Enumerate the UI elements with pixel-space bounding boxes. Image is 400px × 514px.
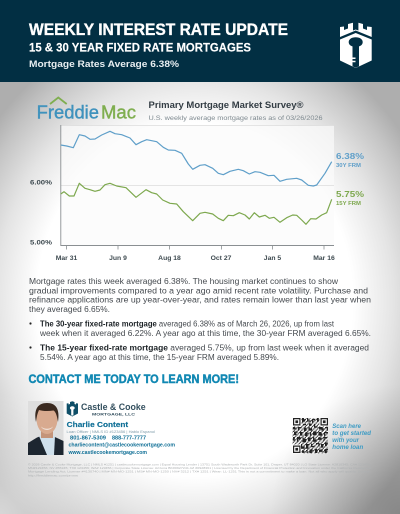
contact heading: CONTACT ME TODAY TO LEARN MORE! — [28, 372, 239, 386]
logo: Castle & Cooke Mortgage — [67, 401, 146, 416]
y-axis labels: 5.00% — [30, 240, 52, 246]
logo: Castle & Cooke Mortgage: Castle & Cooke — [81, 402, 146, 412]
bullet: 15-year mortgage — [29, 344, 369, 362]
email: charliecontent@castlecookemortgage.com — [68, 442, 175, 448]
legal disclaimer: http://freddiemac.com/pmms — [28, 474, 79, 478]
bullet: 15-year mortgage: 5.54%. A year ago at this time, the 15-year FRM averaged 5.89%. — [40, 353, 279, 362]
line chart: mortgage rates — [30, 125, 365, 262]
chart heading: Primary Mortgage Market Survey® — [148, 100, 304, 110]
logo: Freddie Mac — [37, 98, 136, 122]
average rate line: Mortgage Rates Average 6.38% — [29, 59, 179, 69]
bullet: 30-year mortgage — [29, 320, 371, 338]
logo: Castle & Cooke Mortgage: MORTGAGE, LLC — [92, 412, 135, 416]
header banner — [0, 0, 400, 82]
legal disclaimer — [28, 462, 371, 478]
name: Charlie Content — [67, 420, 129, 429]
website: www.castlecookemortgage.com — [68, 450, 147, 456]
y-axis labels — [30, 180, 52, 246]
logo: Freddie Mac: Freddie — [37, 102, 99, 122]
15Y FRM value label: 5.75% — [336, 189, 365, 199]
30-year rate line — [61, 131, 332, 186]
chart subheading: U.S. weekly average mortgage rates as of 03/26/2026 — [148, 115, 323, 122]
phone numbers: 801-867-5309 — [70, 436, 106, 442]
30Y FRM value label: 6.38% — [336, 151, 365, 161]
icon: castle key — [340, 23, 372, 68]
bullet: 15-year mortgage: The 15-year fixed-rate mortgage averaged 5.75%, up from last week when it averaged — [40, 344, 369, 352]
15Y FRM value label — [336, 189, 365, 207]
x-axis labels: Aug 18 — [158, 255, 181, 262]
QR code — [292, 418, 328, 454]
role and license: Loan Officer | NMLS ID #123456 | Hablo Espanol — [66, 429, 155, 434]
loan officer photo — [28, 401, 64, 455]
scan callout: with your — [332, 437, 360, 444]
15Y FRM value label: 15Y FRM — [336, 201, 361, 207]
x-axis labels: Jun 9 — [109, 255, 127, 262]
title: WEEKLY INTEREST RATE UPDATE — [29, 21, 288, 39]
intro paragraph: refinance applications are up year-over-year, and rates remain lower than last year when — [29, 296, 371, 304]
y-axis labels: 6.00% — [30, 180, 52, 186]
scan callout — [332, 423, 371, 451]
intro paragraph: Mortgage rates this week averaged 6.38%. The housing market continues to show — [29, 277, 338, 286]
x-axis labels — [56, 255, 335, 262]
bullet: 30-year mortgage: The 30-year fixed-rate mortgage averaged 6.38% as of March 26, 2026, up from last — [40, 320, 335, 328]
15-year rate line — [61, 183, 332, 224]
x-axis labels: Oct 27 — [211, 255, 232, 262]
30Y FRM value label: 30Y FRM — [336, 163, 361, 169]
subtitle: 15 & 30 YEAR FIXED RATE MORTGAGES — [29, 42, 251, 54]
intro paragraph — [29, 277, 371, 314]
legal disclaimer: MN#123456; NV #65345; TX# 123456; WA# 123456 | Corporate State License: Arizona BK#0927241 AZ #0928361 | Licensed by the Department of Financial Protection and Innovation under the California Residential — [28, 466, 371, 470]
phone numbers — [70, 436, 146, 442]
30Y FRM value label — [336, 151, 365, 169]
x-axis labels: Jan 5 — [264, 255, 281, 262]
phone numbers: 888-777-7777 — [112, 436, 146, 442]
scan callout: to get started — [332, 430, 371, 437]
intro paragraph: they averaged 6.65%. — [29, 305, 110, 314]
scan callout: Scan here — [332, 423, 361, 430]
intro paragraph: gradual improvements compared to a year ago amid recent rate volatility. Purchase and — [29, 286, 368, 295]
bullet: 30-year mortgage: week when it averaged 6.22%. A year ago at this time, the 30-year FRM averaged 6.65%. — [39, 329, 371, 338]
x-axis labels: Mar 16 — [313, 255, 335, 262]
legal disclaimer: Mortgage Lending Act; License #4130740 | MN# MN-MO-1251 | MS# MN-MO-1250 | NV# 3212 | TX# 1251 | Wear: LL-1251 This is not a commitment to make a loan. Not all who apply will qualify. Source: — [28, 470, 371, 474]
legal disclaimer: © 2026 Castle & Cooke Mortgage, LLC | NMLS #1251 | castlecookemortgage.com | Equal Housing Lender | 13751 South Wadsworth Park Dr, Suite 101, Draper, UT 84020 | LO State License: A2810345; CA# 123456; — [28, 462, 371, 466]
contact details — [66, 420, 175, 456]
x-axis labels: Mar 31 — [56, 255, 77, 262]
logo: Freddie Mac: Mac — [101, 102, 136, 122]
scan callout: home loan — [332, 444, 363, 451]
